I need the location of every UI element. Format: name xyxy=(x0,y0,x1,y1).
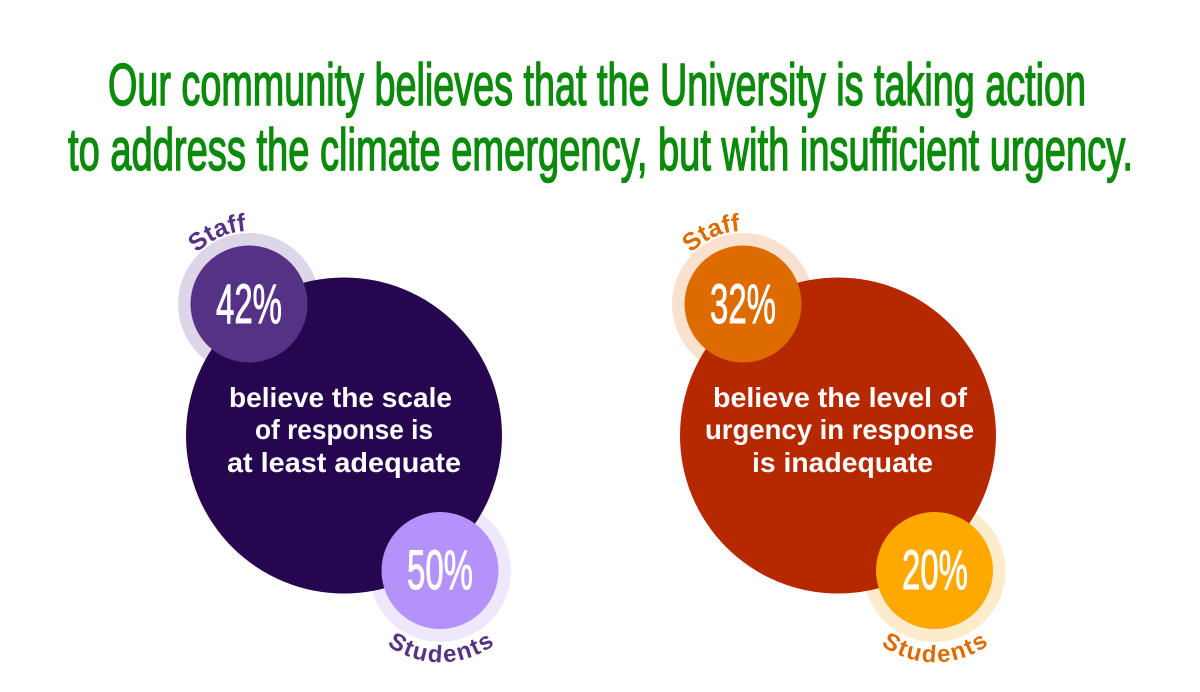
description: urgency of response: urgency in response xyxy=(705,414,974,445)
students label: Students xyxy=(883,634,987,662)
title xyxy=(68,52,1133,183)
staff label: Staff xyxy=(682,213,739,250)
staff circle: 32%: 32% xyxy=(710,272,776,335)
staff label: Staff xyxy=(188,213,245,250)
students label: Students xyxy=(389,634,493,662)
students circle: 50%: 50% xyxy=(407,538,473,601)
main circle: scale of response xyxy=(186,278,502,594)
description: urgency of response xyxy=(705,382,974,478)
description: scale of response: at least adequate xyxy=(227,447,461,478)
students circle: 20% xyxy=(876,512,993,629)
description: scale of response: believe the scale xyxy=(229,382,452,413)
students circle: 50% xyxy=(382,512,498,629)
staff circle: 42% xyxy=(190,246,308,362)
panel: scale of response xyxy=(178,213,511,662)
description: urgency of response: believe the level of xyxy=(713,382,968,413)
main circle: urgency of response xyxy=(680,278,996,594)
students halo: lavender xyxy=(369,500,511,642)
description: scale of response: of response is xyxy=(255,414,433,445)
students circle: 20%: 20% xyxy=(902,538,968,601)
staff halo: orange xyxy=(672,233,814,375)
panel: urgency of response xyxy=(672,213,1006,662)
staff circle: 42%: 42% xyxy=(216,272,282,335)
description: urgency of response: is inadequate xyxy=(752,447,933,478)
staff circle: 32% xyxy=(684,246,802,362)
description: scale of response xyxy=(227,382,461,478)
students halo: amber xyxy=(864,500,1006,642)
staff halo: purple xyxy=(178,233,320,375)
